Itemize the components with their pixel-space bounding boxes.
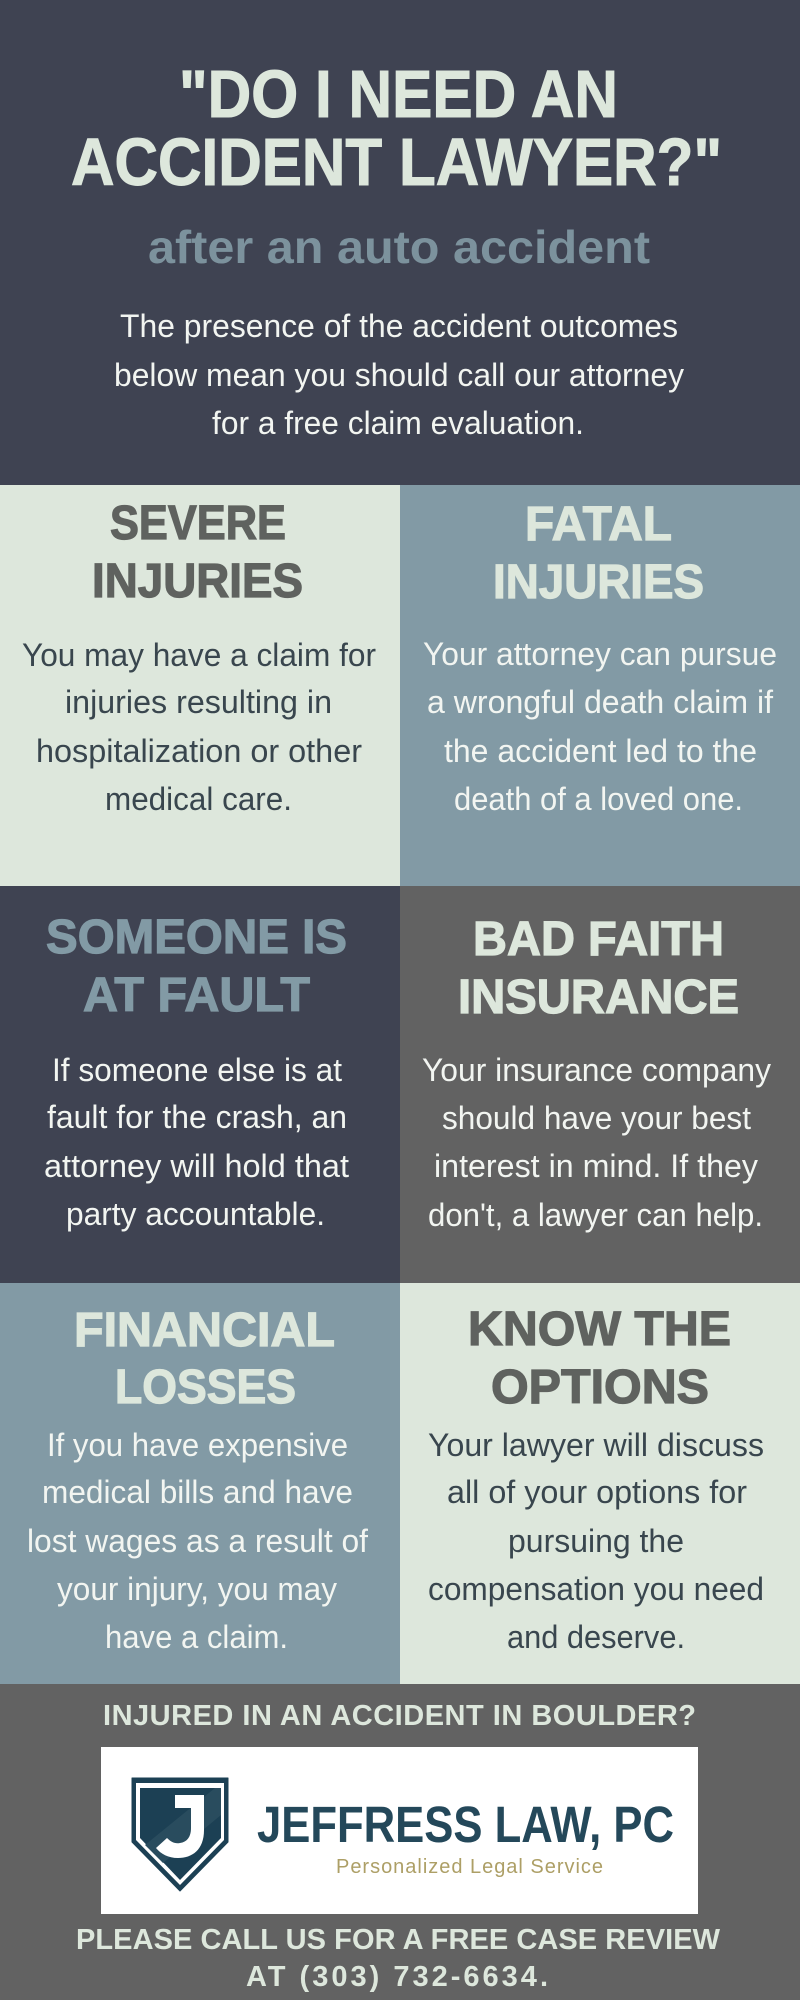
title xyxy=(71,57,722,200)
title: ACCIDENT LAWYER?" xyxy=(71,125,722,200)
text: someone is at fault xyxy=(44,1052,349,1232)
panel: bad faith insurance xyxy=(400,886,800,1283)
heading: know the options: KNOW THE xyxy=(468,1303,731,1356)
heading: financial losses: FINANCIAL xyxy=(74,1304,335,1357)
intro text: below mean you should call our attorney xyxy=(114,357,684,393)
heading: bad faith insurance: INSURANCE xyxy=(458,971,739,1024)
text: severe injuries: injuries resulting in xyxy=(65,684,332,720)
text: severe injuries xyxy=(22,637,376,817)
title: "DO I NEED AN xyxy=(179,57,618,132)
heading: know the options xyxy=(468,1303,731,1414)
icon: shield xyxy=(132,1778,228,1891)
text: financial losses: your injury, you may xyxy=(57,1571,337,1607)
panel: someone is at fault xyxy=(0,886,400,1283)
call to action xyxy=(76,1924,721,1993)
text: severe injuries: You may have a claim for xyxy=(22,637,376,673)
text: bad faith insurance: should have your best xyxy=(442,1100,751,1136)
text: financial losses: lost wages as a result of xyxy=(27,1523,368,1559)
heading: fatal injuries: FATAL xyxy=(525,498,672,551)
text: know the options xyxy=(428,1427,764,1655)
call to action: PLEASE CALL US FOR A FREE CASE REVIEW xyxy=(76,1924,721,1956)
text: know the options: and deserve. xyxy=(507,1619,685,1655)
heading: someone is at fault: SOMEONE IS xyxy=(46,911,347,964)
call to action: AT (303) 732-6634. xyxy=(246,1961,548,1993)
intro text xyxy=(114,308,684,441)
panel: know the options xyxy=(400,1283,800,1684)
intro text: The presence of the accident outcomes xyxy=(120,308,678,344)
panel: header xyxy=(0,0,800,485)
logo box xyxy=(101,1747,698,1914)
logo name: JEFFRESS LAW, PC xyxy=(257,1796,674,1853)
text: financial losses: If you have expensive xyxy=(47,1427,348,1463)
heading: severe injuries: SEVERE xyxy=(110,497,286,550)
text: fatal injuries: Your attorney can pursue xyxy=(423,636,777,672)
text: someone is at fault: fault for the crash, an xyxy=(47,1099,347,1135)
text: know the options: compensation you need xyxy=(428,1571,764,1607)
text: fatal injuries xyxy=(423,636,777,817)
heading: someone is at fault xyxy=(46,911,347,1022)
heading: bad faith insurance xyxy=(458,913,739,1024)
panel: severe injuries xyxy=(0,485,400,886)
text: financial losses: have a claim. xyxy=(105,1619,288,1655)
text: fatal injuries: death of a loved one. xyxy=(454,781,743,817)
heading: financial losses: LOSSES xyxy=(115,1361,296,1414)
heading: fatal injuries: INJURIES xyxy=(493,556,704,609)
text: bad faith insurance: interest in mind. If they xyxy=(434,1148,758,1184)
text: severe injuries: medical care. xyxy=(105,781,292,817)
text: know the options: pursuing the xyxy=(508,1523,684,1559)
heading: fatal injuries xyxy=(493,498,704,609)
text: severe injuries: hospitalization or other xyxy=(36,733,362,769)
text: bad faith insurance: don't, a lawyer can help. xyxy=(428,1197,763,1233)
heading: severe injuries: INJURIES xyxy=(92,555,303,608)
heading: someone is at fault: AT FAULT xyxy=(83,969,310,1022)
heading: financial losses xyxy=(74,1304,335,1414)
text: someone is at fault: party accountable. xyxy=(66,1196,325,1232)
panel: fatal injuries xyxy=(400,485,800,886)
text: fatal injuries: a wrongful death claim if xyxy=(427,684,773,720)
heading: bad faith insurance: BAD FAITH xyxy=(473,913,724,966)
text: financial losses xyxy=(27,1427,368,1655)
text: fatal injuries: the accident led to the xyxy=(444,733,757,769)
logo tagline: Personalized Legal Service xyxy=(336,1856,603,1878)
panel: financial losses xyxy=(0,1283,400,1684)
heading: severe injuries xyxy=(92,497,303,608)
heading: know the options: OPTIONS xyxy=(491,1361,709,1414)
text: bad faith insurance: Your insurance company xyxy=(422,1052,771,1088)
subtitle: after an auto accident xyxy=(148,221,650,273)
text: know the options: all of your options for xyxy=(447,1474,747,1510)
text: someone is at fault: If someone else is at xyxy=(52,1052,342,1088)
text: know the options: Your lawyer will discuss xyxy=(428,1427,764,1463)
panel: footer xyxy=(0,1684,800,2000)
text: someone is at fault: attorney will hold that xyxy=(44,1148,349,1184)
footer heading: INJURED IN AN ACCIDENT IN BOULDER? xyxy=(103,1700,696,1732)
intro text: for a free claim evaluation. xyxy=(212,405,584,441)
text: bad faith insurance xyxy=(422,1052,771,1233)
text: financial losses: medical bills and have xyxy=(42,1474,353,1510)
